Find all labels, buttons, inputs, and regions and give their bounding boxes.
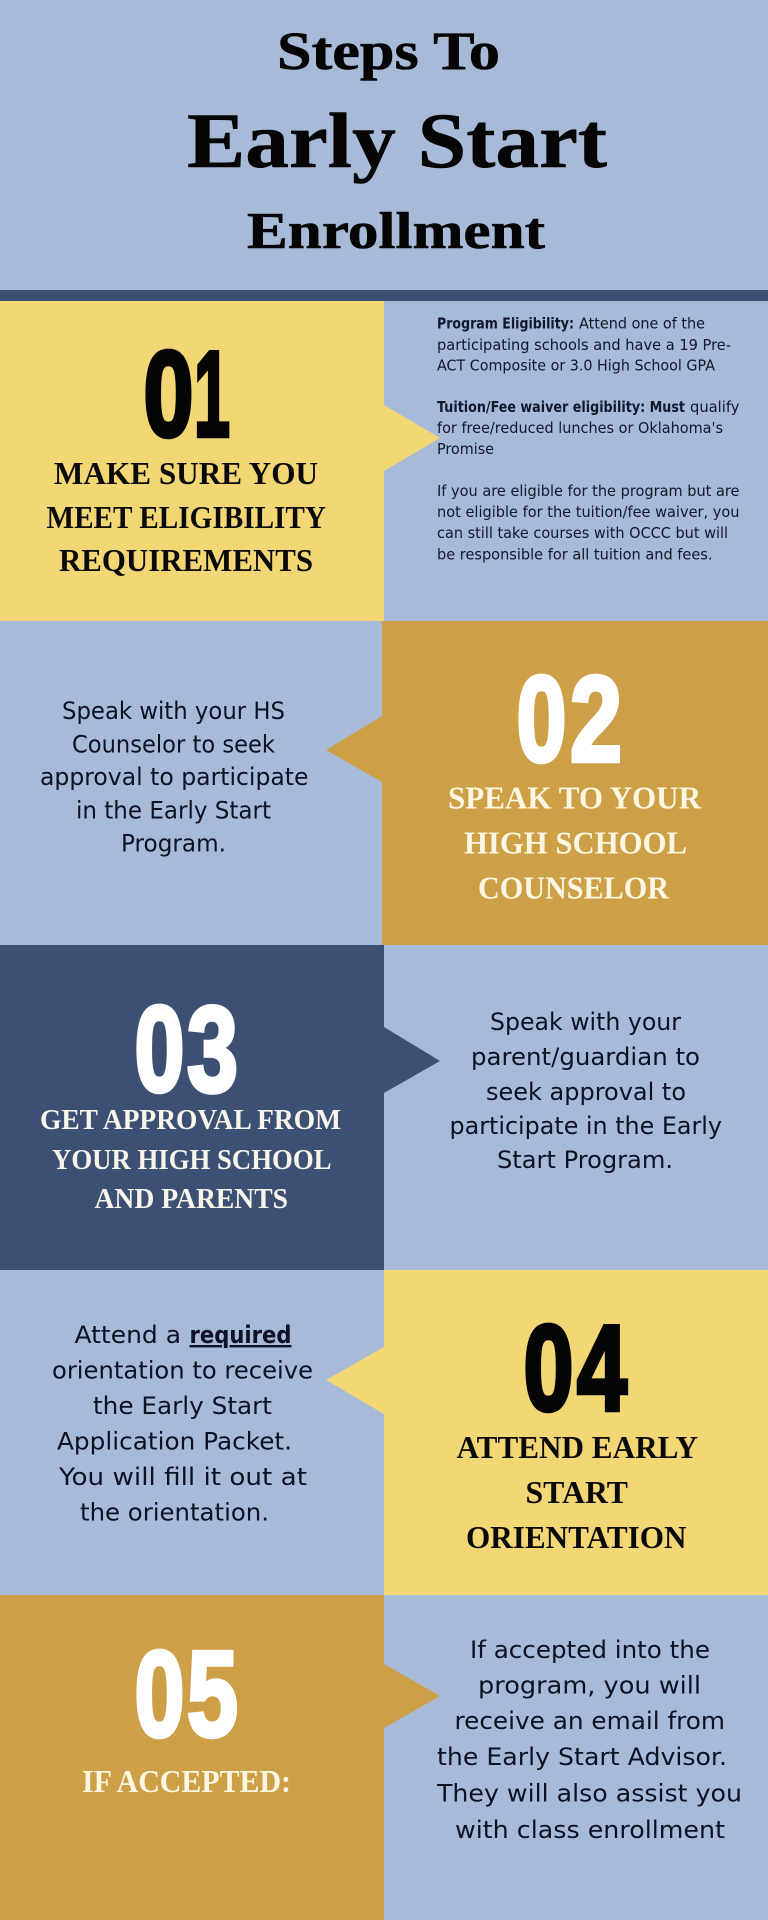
- step 4 description: [52, 1321, 313, 1526]
- step 3 description: seek approval to: [486, 1078, 686, 1106]
- step 4 number: 4: [577, 1300, 627, 1436]
- step 3 heading: AND PARENTS: [94, 1183, 288, 1215]
- step 1 details: can still take courses with OCCC but will: [437, 524, 728, 542]
- step 4 heading: ORIENTATION: [466, 1519, 686, 1555]
- step 3 description: Speak with your: [490, 1008, 681, 1036]
- step 1 details: If you are eligible for the program but are: [437, 482, 740, 500]
- step 1 details: Program Eligibility:: [437, 314, 574, 332]
- step 5 heading: IF ACCEPTED:: [82, 1763, 291, 1799]
- title: Steps To: [277, 21, 500, 81]
- step 1 details: for free/reduced lunches or Oklahoma's: [437, 419, 723, 437]
- step 1 details: participating schools and have a 19 Pre-: [437, 336, 731, 354]
- step 2 heading: HIGH SCHOOL: [464, 825, 687, 861]
- step 4 description: Attend a: [74, 1321, 181, 1349]
- step 1 number: 0: [144, 326, 194, 462]
- step 1 details: Promise: [437, 440, 494, 458]
- step 2 description: approval to participate: [40, 763, 308, 791]
- step 3 heading: [40, 1104, 341, 1215]
- step 4 number: [524, 1300, 627, 1436]
- step 4 description: You will fill it out at: [58, 1463, 307, 1491]
- step 1 details: Tuition/Fee waiver eligibility: Must: [437, 398, 685, 416]
- step 2 heading: [448, 780, 702, 906]
- step 3 description: [450, 1008, 722, 1174]
- step 5 number: [134, 1626, 238, 1762]
- panel: step 5: [0, 1595, 742, 1920]
- step 1 details: be responsible for all tuition and fees.: [437, 546, 712, 564]
- step 3 description: Start Program.: [497, 1146, 673, 1174]
- step 5 description: the Early Start Advisor.: [437, 1743, 727, 1771]
- step 5 block with arrow: [0, 1595, 440, 1920]
- step 2 heading: SPEAK TO YOUR: [448, 780, 702, 816]
- panel: step 2: [40, 621, 768, 945]
- step 3 description: parent/guardian to: [471, 1043, 700, 1071]
- step 4 block with arrow: [326, 1270, 768, 1595]
- step 2 heading: COUNSELOR: [478, 870, 670, 906]
- step 1 number: 1: [194, 326, 230, 462]
- step 3 heading: YOUR HIGH SCHOOL: [52, 1144, 332, 1176]
- step 1 heading: MEET ELIGIBILITY: [46, 499, 326, 535]
- step 1 details: qualify: [690, 398, 740, 416]
- step 4 number: 0: [524, 1300, 574, 1436]
- step 5 description: They will also assist you: [436, 1780, 742, 1808]
- step 3 heading: GET APPROVAL FROM: [40, 1104, 341, 1136]
- step 4 description: Application Packet.: [57, 1427, 292, 1455]
- panel: step 3: [0, 945, 722, 1270]
- step 1 details: not eligible for the tuition/fee waiver, you: [437, 503, 740, 521]
- step 5 number: 5: [187, 1626, 238, 1762]
- step 2 description: in the Early Start: [76, 797, 271, 825]
- step 5 number: 0: [134, 1626, 184, 1762]
- step 3 number: [134, 981, 238, 1117]
- step 5 description: If accepted into the: [470, 1636, 710, 1664]
- step 1 details: Attend one of the: [579, 314, 705, 332]
- title: Enrollment: [247, 203, 546, 260]
- step 4 heading: START: [526, 1474, 628, 1510]
- step 5 description: with class enrollment: [455, 1816, 725, 1844]
- panel: step 4: [52, 1270, 768, 1595]
- step 4 description: the orientation.: [80, 1498, 269, 1526]
- step 2 block with arrow: [326, 621, 768, 945]
- step 2 description: Program.: [121, 830, 226, 858]
- step 2 description: Counselor to seek: [72, 731, 275, 759]
- step 1 details: ACT Composite or 3.0 High School GPA: [437, 357, 715, 375]
- step 1 heading: [46, 455, 326, 578]
- step 1 details: [437, 314, 740, 564]
- title: Early Start: [187, 97, 607, 184]
- step 1 block with arrow: [0, 301, 440, 621]
- step 4 heading: ATTEND EARLY: [456, 1429, 698, 1465]
- step 3 block with arrow: [0, 945, 440, 1270]
- step 3 number: 0: [134, 981, 184, 1117]
- title: [187, 21, 607, 260]
- step 2 number: 2: [570, 651, 622, 787]
- step 5 description: [436, 1636, 742, 1844]
- step 2 number: 0: [516, 651, 566, 787]
- panel: step 1: [0, 301, 740, 621]
- step 4 description: the Early Start: [93, 1392, 272, 1420]
- step 5 description: receive an email from: [454, 1707, 725, 1735]
- step 4 description: orientation to receive: [52, 1357, 313, 1385]
- step 2 number: [516, 651, 622, 787]
- step 2 description: Speak with your HS: [62, 697, 285, 725]
- step 1 heading: REQUIREMENTS: [59, 542, 313, 578]
- step 2 description: [40, 697, 308, 858]
- step 5 description: program, you will: [478, 1672, 701, 1700]
- step 4 description: required: [190, 1321, 292, 1349]
- step 1 heading: MAKE SURE YOU: [54, 455, 318, 491]
- step 3 number: 3: [187, 981, 238, 1117]
- step 4 heading: [456, 1429, 698, 1555]
- step 3 description: participate in the Early: [450, 1112, 722, 1140]
